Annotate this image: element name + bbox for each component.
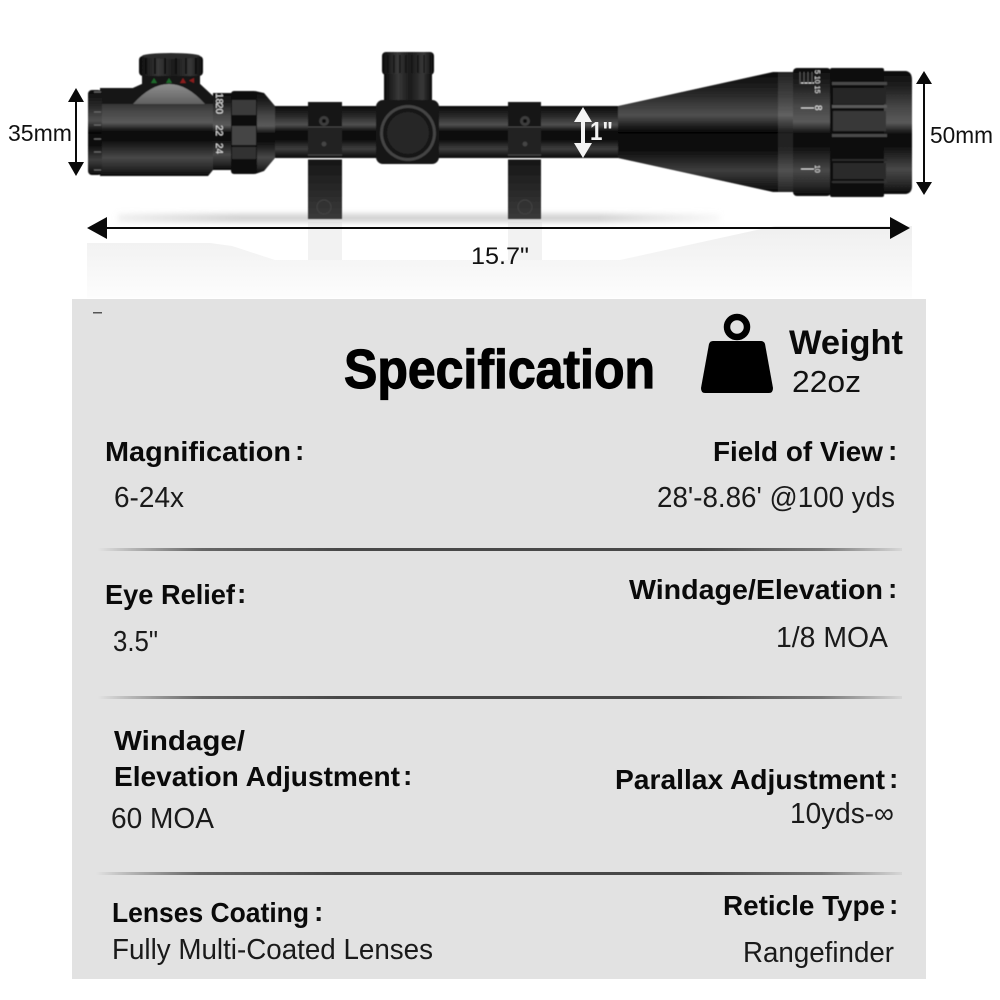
dimension: 35mm bbox=[8, 88, 84, 176]
magnification ring: 20 bbox=[213, 103, 224, 115]
spec: windage/elevation adjustment: Elevation Adjustment bbox=[114, 761, 400, 792]
spec: eye relief bbox=[105, 578, 246, 658]
spec: field of view: : bbox=[888, 435, 897, 466]
spec: parallax adjustment: Parallax Adjustment bbox=[615, 764, 885, 795]
dimension: total length 15.7 inches: 15.7" bbox=[471, 243, 529, 270]
spec: windage/elevation: : bbox=[888, 573, 897, 604]
objective taper bbox=[618, 72, 795, 192]
spec: magnification: Magnification bbox=[105, 436, 291, 467]
dimension: 1 inch tube: 1" bbox=[590, 116, 613, 146]
spec: reticle type bbox=[723, 889, 898, 969]
spec: eye relief: Eye Relief bbox=[105, 579, 236, 610]
dimension: 35mm: 35mm bbox=[8, 120, 72, 146]
magnification ring: 22 bbox=[213, 125, 224, 137]
magnification knurl bbox=[231, 91, 275, 174]
spec: windage/elevation: Windage/Elevation bbox=[629, 574, 883, 605]
spec: windage/elevation adjustment: : bbox=[403, 760, 412, 791]
objective knurl bbox=[830, 68, 887, 197]
spec: magnification bbox=[105, 435, 304, 514]
spec: magnification: 6-24x bbox=[114, 482, 184, 514]
spec: magnification: : bbox=[295, 435, 304, 466]
dimension: 50mm: 50mm bbox=[930, 122, 993, 148]
eyepiece housing bbox=[88, 84, 213, 176]
panel: specification bbox=[72, 299, 926, 979]
objective end cap bbox=[878, 71, 912, 194]
spec: field of view: Field of View bbox=[713, 436, 883, 467]
turret block bbox=[376, 52, 439, 164]
magnification ring bbox=[213, 93, 233, 170]
magnification ring: 18 bbox=[213, 93, 224, 105]
icon: weight bbox=[701, 317, 773, 393]
heading: Specification bbox=[344, 338, 655, 400]
spec: lenses coating: Fully Multi-Coated Lenses bbox=[112, 934, 433, 966]
spec: windage/elevation: 1/8 MOA bbox=[776, 622, 889, 654]
spec: lenses coating: Lenses Coating bbox=[112, 897, 309, 928]
table shadow under scope bbox=[118, 214, 720, 222]
dimension: total length 15.7 inches bbox=[87, 217, 910, 270]
spec: windage/elevation adjustment: 60 MOA bbox=[111, 803, 215, 835]
spec: windage/elevation bbox=[629, 573, 897, 654]
spec: lenses coating: : bbox=[314, 896, 323, 927]
spec: field of view: 28'-8.86' @100 yds bbox=[657, 482, 895, 514]
spec: eye relief: : bbox=[237, 578, 246, 609]
weight value: Weight bbox=[789, 324, 903, 362]
spec: windage/elevation adjustment bbox=[111, 725, 412, 835]
dimension: 1 inch tube bbox=[574, 107, 613, 158]
mounting ring feet bbox=[308, 160, 541, 219]
objective ring with scale bbox=[793, 68, 831, 196]
spec: windage/elevation adjustment: Windage/ bbox=[114, 725, 245, 756]
weight value: 22oz bbox=[792, 364, 861, 399]
spec: eye relief: 3.5" bbox=[113, 626, 158, 658]
spec: reticle type: Reticle Type bbox=[723, 890, 885, 921]
magnification ring: 24 bbox=[213, 143, 224, 155]
spec: parallax adjustment: : bbox=[889, 763, 898, 794]
rifle scope bbox=[88, 52, 912, 219]
weight value bbox=[789, 324, 903, 399]
spec: parallax adjustment bbox=[615, 763, 898, 830]
objective ring with scale: 8 bbox=[812, 105, 823, 111]
scope reflection bbox=[87, 222, 912, 298]
objective ring with scale: 10 bbox=[813, 165, 820, 173]
main tube bbox=[274, 106, 622, 158]
spec: reticle type: Rangefinder bbox=[743, 937, 894, 969]
dimension: 50mm bbox=[916, 71, 993, 195]
spec: lenses coating bbox=[112, 896, 433, 966]
spec: field of view bbox=[657, 435, 897, 514]
left turret knob bbox=[139, 53, 203, 88]
scope rings bbox=[308, 102, 541, 158]
spec: reticle type: : bbox=[889, 889, 898, 920]
objective ring with scale: 5 10 15 bbox=[813, 70, 820, 93]
spec: parallax adjustment: 10yds-∞ bbox=[790, 798, 894, 830]
